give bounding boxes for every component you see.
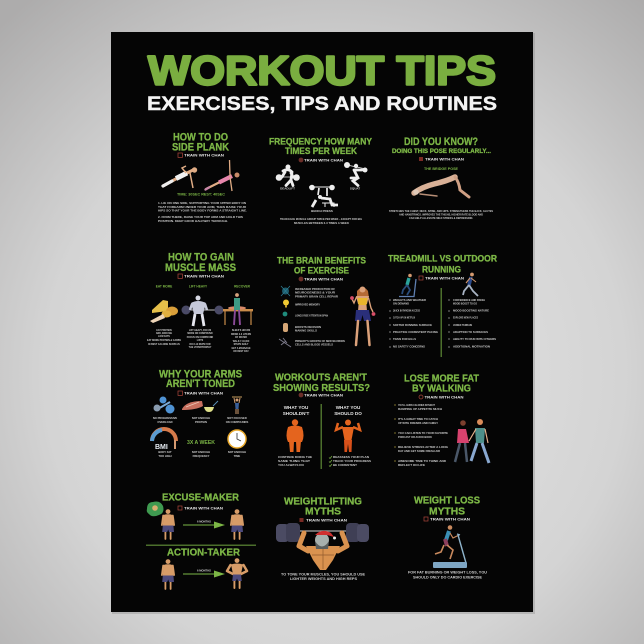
note: MUSCLES BETWEEN 2-3 TIMES A WEEK: [294, 221, 349, 225]
eat more notes: IN BEST CALORIE SURPLUS: [148, 343, 180, 346]
main title: WORKOUT TIPS: [148, 48, 496, 94]
row two labels: NOT ENOUGH: [228, 450, 246, 454]
outdoor list: VARIED TERRAIN: [453, 323, 472, 327]
benefit: attention span: LONGS RISE ATTENTION SPAN: [295, 314, 328, 318]
icon: steak and rice: [182, 401, 218, 412]
benefit: new neurons: PRIMARY'S GROWTH OF NEW NEURONS: [295, 339, 345, 343]
icon: treadmill runner: [399, 274, 416, 296]
recover notes: STEPS DAILY: [234, 343, 249, 346]
lift heavy notes: MORE ON COMPOUND: [187, 333, 213, 335]
panel: workouts no results: [273, 372, 371, 469]
icon: walking couple: [455, 419, 489, 463]
label: deadlift: DEADLIFT: [280, 186, 295, 190]
outdoor list: ABILITY TO RUN WITH OTHERS: [453, 337, 496, 341]
tips list: DAY AND GET SOME FRESH AIR: [398, 449, 440, 453]
heading: [277, 256, 366, 276]
label: bench press: BENCH PRESS: [311, 209, 333, 213]
instructions: [158, 201, 247, 223]
eat more notes: EAT PROTEIN: [156, 329, 172, 332]
row one labels: ON COMPOUNDS: [226, 420, 248, 424]
timeline arrow: 6 MONTHS: [197, 520, 211, 524]
heading: WHY YOUR ARMS: [159, 368, 242, 380]
icon: santa lifter with barbell: [276, 523, 369, 570]
treadmill list: QUICK BATHROOM ACCESS: [393, 308, 420, 312]
icon: outdoor runner: [463, 273, 478, 296]
heading: [388, 254, 497, 274]
left column heading: WHAT YOU: [284, 405, 309, 410]
divider: [146, 544, 256, 547]
heading: MUSCLE MASS: [165, 262, 236, 274]
outdoor list: MOOD BOOST TO GO: [453, 302, 477, 306]
icon: squat: [344, 162, 368, 186]
heading: WEIGHT LOSS: [414, 496, 480, 506]
left notes: [278, 455, 312, 467]
timeline arrow: 6 MONTHS: [197, 568, 211, 572]
heading: WEIGHTLIFTING: [284, 496, 362, 508]
heading: OF EXERCISE: [294, 266, 349, 276]
heading: [159, 368, 242, 390]
panel: arms not toned: [152, 368, 248, 458]
treadmill list: TRAIN FOR HILLS: [393, 337, 416, 341]
treadmill bullets: [389, 299, 391, 348]
icon: neurons: [281, 286, 290, 296]
column labels: RECOVER: [234, 284, 251, 288]
icon: deadlift: [276, 164, 300, 186]
heading: [269, 136, 372, 156]
outdoor bullets: [448, 299, 450, 348]
lift heavy notes: THE HYPERTROPHY: [189, 347, 212, 349]
lift heavy notes: LIFT HEAVY, FOCUS: [189, 329, 212, 332]
panel: did you know: [389, 136, 493, 220]
outdoor list: ADDITIONAL MOTIVATION: [453, 344, 490, 348]
recover notes: WALK 7-10,000: [233, 340, 250, 343]
heading: [392, 136, 491, 155]
right checklist: REASSESS YOUR PLAN: [333, 455, 369, 459]
lift heavy notes: DO 8-12 REPS FOR: [189, 344, 211, 346]
right checklist: [333, 455, 371, 467]
explanation: CAN HELP ALLEVIATE MILD STRESS & DEPRESSION.: [409, 216, 473, 220]
heading: RUNNING: [422, 264, 461, 274]
lift heavy notes: FOCUS ON COMPOUND: [187, 337, 214, 339]
left notes: SAME THING THAT: [278, 459, 310, 463]
heading: [165, 252, 236, 274]
tips list: RAMPING UP APPETITE MUCH: [398, 407, 442, 411]
row two labels: [158, 450, 246, 458]
brand mark: TRAIN WITH CHAN: [184, 506, 223, 510]
icon: bridge pose figure: [413, 177, 469, 197]
title block: [147, 48, 497, 115]
bullets: [394, 404, 396, 462]
divider: [320, 404, 323, 469]
column labels: [156, 284, 251, 288]
explanation: [389, 209, 493, 220]
tips list: REFLECT ON LIFE: [398, 463, 425, 467]
column labels: EAT MORE: [156, 284, 172, 288]
heading: MYTHS: [429, 506, 465, 518]
eat more notes: AND, ENOUGH: [156, 332, 173, 335]
row two labels: TIME: [234, 454, 240, 458]
icon: woman with dumbbells: [350, 286, 375, 345]
right checklist: BE CONSISTENT: [333, 463, 357, 467]
heading: excuse-maker: EXCUSE-MAKER: [162, 492, 240, 504]
panel: brain benefits: [277, 256, 375, 347]
right column heading: WHAT YOU: [336, 405, 361, 410]
outdoor list: MOOD BOOSTING NATURE: [453, 308, 489, 312]
icon: thought cloud: [147, 502, 164, 516]
heading: LOSE MORE FAT: [404, 374, 479, 384]
subtitle: EXERCISES, TIPS AND ROUTINES: [147, 93, 497, 115]
pose name: THE BRIDGE POSE: [424, 167, 458, 171]
benefit: neurogenesis: [295, 287, 338, 298]
icon: nerve cell: [279, 338, 291, 347]
divider: [440, 288, 443, 357]
explanation: AND HAMSTRINGS. IMPROVES THE THIGHS, HIGHER RATE BLOOD AND: [399, 212, 483, 216]
note: [280, 217, 362, 225]
instructions: THAT FOREARM UNDER YOUR ARM, THEN RAISE YOUR: [158, 205, 246, 209]
row two labels: TOO HIGH: [158, 454, 172, 458]
treadmill list: CATCH UP ON NETFLIX: [393, 316, 415, 320]
poster shadow: [112, 33, 535, 614]
treadmill list: SOFTER RUNNING SURFACE: [393, 323, 432, 327]
heading: [404, 374, 479, 394]
heading: HOW TO GAIN: [168, 252, 234, 264]
tips list: UP WITH FRIENDS AND FAMILY: [398, 421, 438, 425]
icon: dumbbell: [154, 396, 174, 414]
brand mark: TRAIN WITH CHAN: [184, 275, 224, 279]
heading: AREN'T TONED: [166, 378, 235, 390]
heading: [284, 496, 362, 518]
row one labels: PROTEIN: [195, 420, 207, 424]
benefit: reading skills: MAKING SKILLS: [295, 328, 317, 332]
heading: DOING THIS POSE REGULARLY...: [392, 148, 491, 155]
icon: muscular figure: [336, 420, 360, 452]
myth text: TO TONE YOUR MUSCLES, YOU SHOULD USE: [281, 572, 365, 576]
brand mark: TRAIN WITH CHAN: [304, 277, 343, 281]
row two labels: BODY FAT: [158, 450, 172, 454]
icon: woman in side plank: [206, 160, 240, 191]
heading: [414, 496, 480, 518]
note: TRAIN EACH MUSCLE GROUP TWICE PER WEEK – EXCEPT FOR BIG: [280, 217, 362, 221]
treadmill list: WEIGHTS AND WEATHER: [393, 298, 426, 302]
recover notes: GET A MASSAGE: [231, 347, 251, 350]
left notes: CONTINUE DOING THE: [278, 455, 312, 459]
benefit: reading skills: [295, 325, 321, 332]
icon: treadmill runner: [433, 525, 467, 568]
left column heading: SHOULDN'T: [283, 411, 309, 416]
icon: muscular man after training: [227, 558, 247, 588]
left notes: YOU ALWAYS DO: [278, 463, 304, 467]
brand mark: TRAIN WITH CHAN: [425, 157, 464, 161]
tips list: [398, 403, 448, 467]
benefit: neurogenesis: INCREASED PRODUCTION OF: [295, 287, 335, 291]
heading: DID YOU KNOW?: [404, 136, 478, 148]
instructions: HIPS SO THAT YOUR THE BODY FORMS A STRAIGHT LINE.: [158, 209, 247, 213]
eat more notes: EAT MORE PROTEIN & CARBS: [147, 339, 181, 342]
icon: attention: [283, 312, 287, 316]
heading: SIDE PLANK: [172, 142, 229, 154]
heading: TREADMILL VS OUTDOOR: [388, 254, 497, 264]
benefit: new neurons: CELLS AND BLOOD VESSELS: [295, 342, 333, 346]
recover notes: DRINK 2-3 LITERS: [231, 334, 251, 336]
outdoor list: [453, 298, 496, 348]
treadmill list: NO SAFETY CONCERNS: [393, 344, 425, 348]
row one labels: NOT FOCUSED: [227, 416, 247, 420]
recover notes: OR REST DAY: [233, 350, 249, 353]
icon: lifter with barbell: [182, 296, 224, 326]
tips list: AWESOME TIME TO THINK AND: [398, 459, 446, 463]
icon: clock: [228, 430, 246, 448]
check marks: [329, 456, 332, 466]
panel: weightlifting myths: [276, 496, 369, 581]
row one labels: OVERLOAD: [157, 420, 173, 424]
myth text: [408, 570, 488, 580]
label: squat: SQUAT: [350, 186, 360, 190]
lift heavy notes: LIFTS: [197, 340, 204, 342]
panel: frequency: [269, 136, 372, 225]
instructions: POSITION. KEEP GOOD HALFWAY THROUGH.: [158, 219, 228, 223]
icon: massage table: [223, 293, 253, 325]
tips list: IT'S A GREAT TIME TO CATCH: [398, 417, 438, 421]
row two labels: NOT ENOUGH: [192, 450, 210, 454]
benefit: reading skills: BOOSTS DECISION: [295, 325, 321, 329]
icon: pull-up: [232, 397, 242, 414]
poster board: [111, 32, 533, 612]
tips list: RELIEVE STRESS AFTER A LONG: [398, 445, 448, 449]
row one labels: NOT ENOUGH: [192, 416, 210, 420]
right column heading: SHOULD DO: [334, 411, 362, 416]
icon: overweight figure: [286, 419, 304, 452]
icon: light bulb: [283, 300, 289, 308]
panel: side plank: [158, 132, 247, 223]
benefit: memory: IMPROVED MEMORY: [295, 302, 320, 306]
myth text: [281, 572, 365, 581]
myth text: LIGHTER WEIGHTS AND HIGH REPS: [290, 577, 357, 581]
icon: brain cells: [283, 323, 288, 332]
heading: HOW TO DO: [173, 132, 228, 144]
brand mark: TRAIN WITH CHAN: [184, 392, 223, 396]
benefit: neurogenesis: NEUROGENESIS & YOUR: [295, 290, 335, 294]
recover notes: SLEEP 8 HOURS: [232, 330, 251, 332]
tips list: YOU'LL BURN CALORIES WITHOUT: [398, 403, 435, 407]
instructions: 2. FROM THERE, RAISE YOUR TOP ARM AND HOLD THIS: [158, 215, 243, 219]
outdoor list: EXPLORE NEW PLACES: [453, 316, 478, 320]
heading: BY WALKING: [412, 384, 471, 394]
treadmill list: PRACTICE CONSISTENT PACING: [393, 330, 438, 334]
icon: man after six months: [231, 509, 243, 539]
icon: bmi gauge: BMI: [155, 444, 168, 451]
row one labels: NO PROGRESSIVE: [153, 416, 177, 420]
eat more notes: [147, 329, 181, 346]
heading: action-taker: ACTION-TAKER: [167, 548, 241, 558]
outdoor list: CONVENIENCE AND FRESH: [453, 298, 485, 302]
panel: weight loss myths: [408, 496, 488, 580]
treadmill list: [393, 298, 438, 348]
icon: food: [150, 300, 178, 323]
frequency callout: 3X A WEEK: [187, 440, 215, 446]
treadmill list: ON DEMAND: [393, 302, 409, 306]
right column heading: [334, 405, 362, 416]
column labels: LIFT HEAVY: [189, 284, 208, 288]
row two labels: FREQUENCY: [193, 454, 210, 458]
explanation: STRETCHES THE CHEST, NECK, SPINE, AND HIPS. STRENGTHENS THE BACK, GLUTES: [389, 209, 493, 213]
myth text: SHOULD ONLY DO CARDIO EXERCISE: [413, 576, 482, 580]
brand mark: TRAIN WITH CHAN: [424, 395, 464, 399]
icon: man before training: [162, 559, 174, 589]
icon: bench press: [309, 185, 338, 207]
left column heading: [283, 405, 309, 416]
time and rest label: TIME: 30SEC REST: 40SEC: [177, 192, 226, 196]
brand mark: TRAIN WITH CHAN: [425, 276, 464, 280]
panel: muscle mass: [147, 252, 253, 353]
heading: [273, 372, 370, 394]
panel: lose fat walking: [394, 374, 489, 467]
tips list: YOU CAN LISTEN TO YOUR FAVORITE: [398, 431, 448, 435]
recover notes: OF WATER: [235, 336, 247, 339]
icon: man before: [162, 509, 174, 539]
myth text: FOR FAT BURNING OR WEIGHT LOSS, YOU: [408, 570, 488, 574]
heading: MYTHS: [305, 506, 341, 518]
eat more notes: LOW FATS: [158, 335, 170, 338]
brand mark: TRAIN WITH CHAN: [184, 154, 224, 158]
recover notes: [231, 330, 251, 353]
panel: treadmill vs outdoor: [388, 254, 497, 357]
panel: excuse maker vs action taker: [146, 492, 256, 589]
heading: SHOWING RESULTS?: [273, 383, 370, 394]
tips list: PODCAST OR AUDIO BOOK: [398, 435, 432, 439]
lift heavy notes: [187, 329, 214, 349]
brand mark: TRAIN WITH CHAN: [306, 518, 347, 522]
heading: [172, 132, 229, 154]
icon: man in side plank: [163, 166, 197, 188]
outdoor list: ADAPTION TO SURFACES: [453, 330, 488, 334]
heading: TIMES PER WEEK: [285, 146, 357, 156]
brand mark: TRAIN WITH CHAN: [304, 393, 343, 397]
benefit: neurogenesis: PRIMARY BRAIN CELL REPAIR: [295, 294, 338, 298]
instructions: 1. LIE ON ONE SIDE, SUPPORTING YOUR UPPER BODY ON: [158, 201, 246, 205]
benefit: new neurons: [295, 339, 345, 346]
heading: THE BRAIN BENEFITS: [277, 256, 366, 266]
row one labels: [153, 416, 248, 424]
brand mark: TRAIN WITH CHAN: [430, 517, 470, 521]
heading: WORKOUTS AREN'T: [275, 372, 367, 384]
heading: FREQUENCY HOW MANY: [269, 136, 372, 146]
right checklist: TRACK YOUR PROGRESS: [333, 459, 371, 463]
brand mark: TRAIN WITH CHAN: [304, 158, 343, 162]
